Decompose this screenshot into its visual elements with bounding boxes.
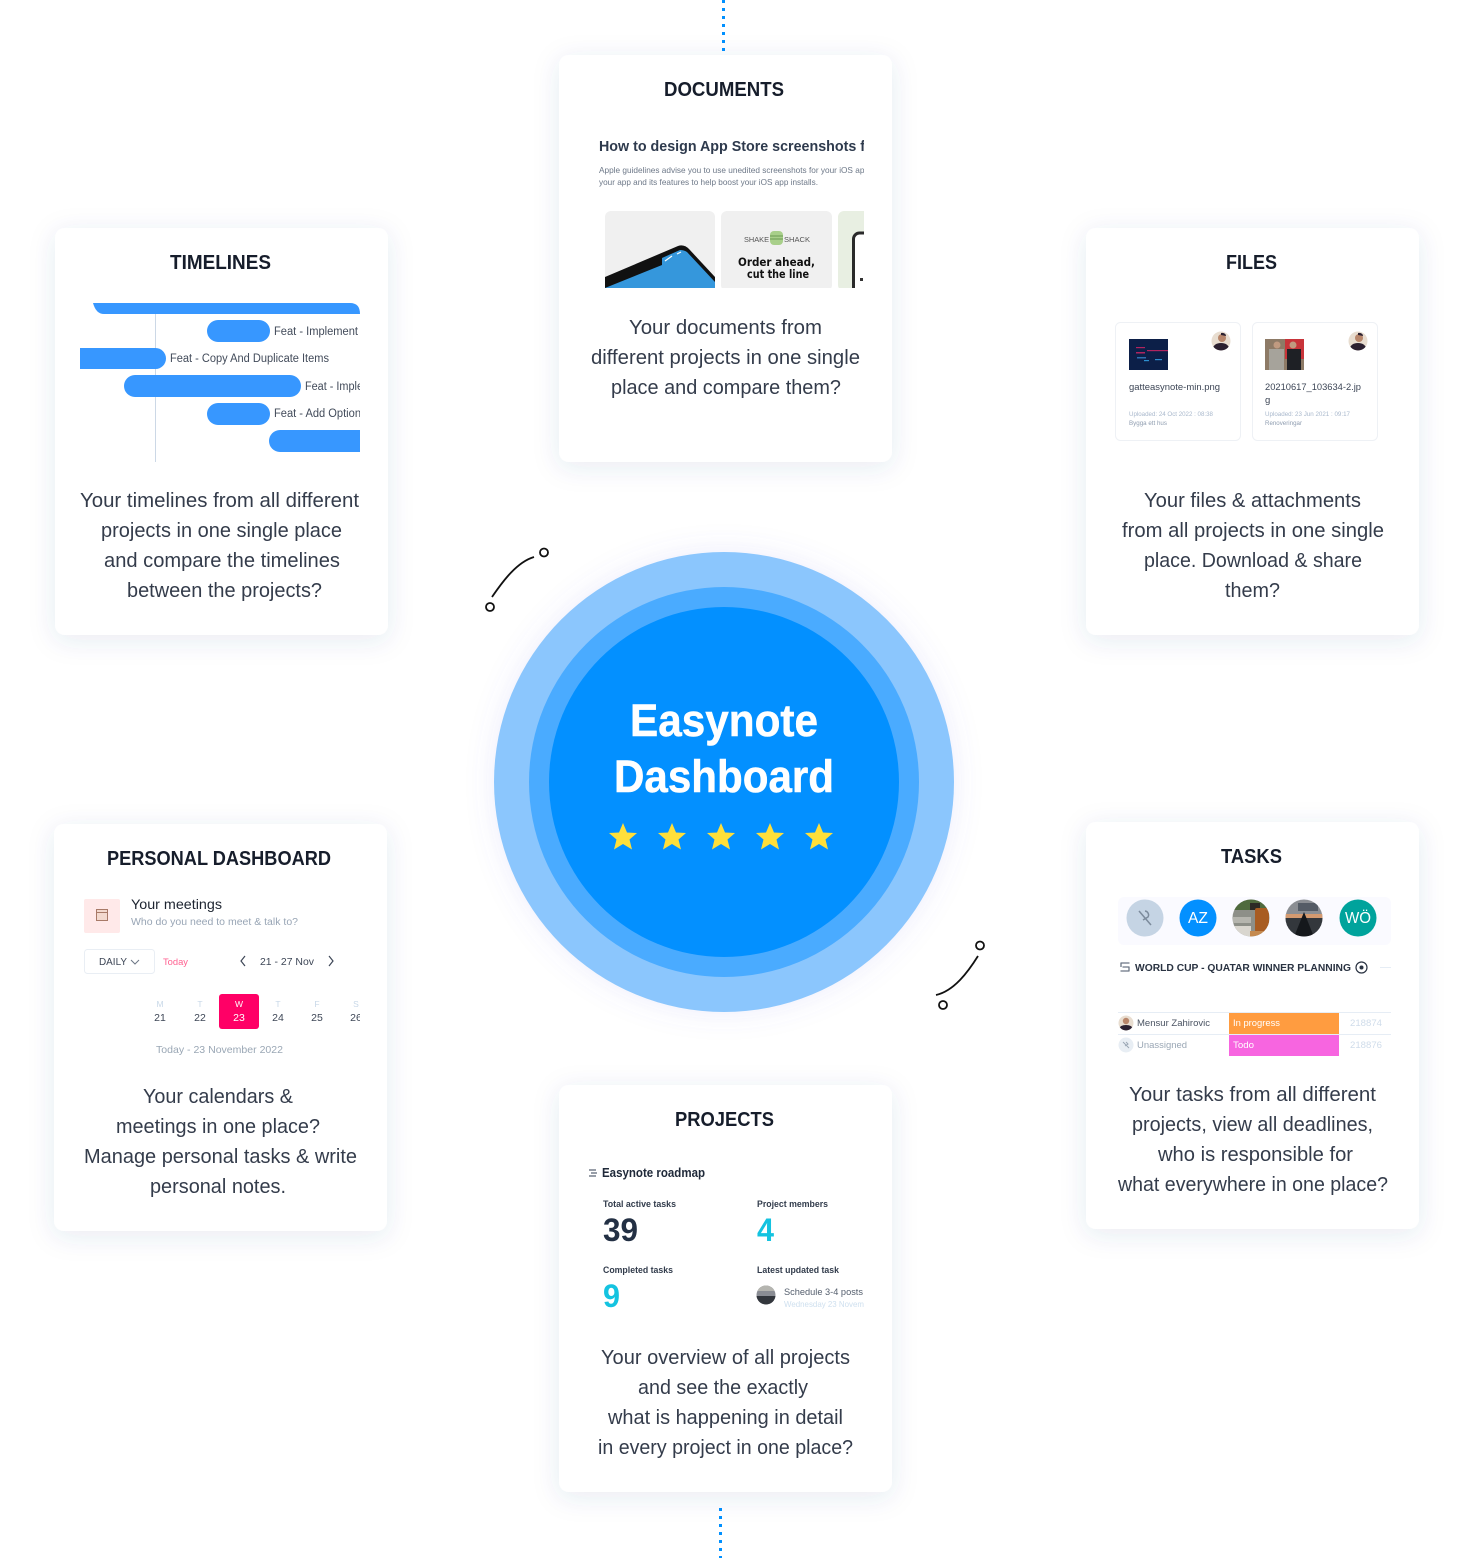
task table <box>1118 1012 1391 1056</box>
article title: How to design App Store screenshots f <box>599 139 865 155</box>
stat: latest updated task: Schedule 3-4 posts <box>784 1287 863 1298</box>
thumbnail: third phone <box>838 211 864 288</box>
description: documents: place and compare them? <box>611 377 841 399</box>
heading: timelines: TIMELINES <box>170 252 271 274</box>
gantt chart: Feat - Imple <box>305 381 363 393</box>
file card: jpg: g <box>1265 395 1270 406</box>
week calendar: 23 <box>233 1012 245 1024</box>
badge title: Dashboard <box>614 751 834 802</box>
member avatars <box>1126 900 1376 936</box>
task table: 218876 <box>1350 1040 1382 1051</box>
dotted connector: top <box>722 0 725 52</box>
heading: files: FILES <box>1226 252 1277 274</box>
description: files: them? <box>1225 580 1280 602</box>
article intro: your app and its features to help boost your iOS app installs. <box>599 177 818 187</box>
panel: personal dashboard <box>54 824 387 1231</box>
task table: Todo <box>1233 1040 1254 1051</box>
thumbnail: shake shack: Order ahead, <box>738 255 815 269</box>
file card: jpg: Renoveringar <box>1265 420 1303 427</box>
week calendar: 26 <box>350 1012 362 1024</box>
week calendar <box>154 994 362 1029</box>
stat: project members: 4 <box>757 1212 774 1248</box>
date range navigation <box>241 956 333 968</box>
article intro: Apple guidelines advise you to use unedited screenshots for your iOS app <box>599 165 869 175</box>
heading: projects: PROJECTS <box>675 1109 774 1131</box>
project title row: WORLD CUP - QUATAR WINNER PLANNING <box>1135 962 1351 974</box>
week calendar: S <box>353 999 359 1009</box>
description: projects: Your overview of all projects <box>601 1347 850 1369</box>
description: projects: in every project in one place? <box>598 1437 853 1459</box>
today link: Today <box>163 957 189 967</box>
week calendar: 21 <box>154 1012 166 1024</box>
stat: total active tasks: 39 <box>603 1212 638 1248</box>
gantt chart <box>80 303 360 462</box>
description: timelines: Your timelines from all different <box>80 490 359 512</box>
thumbnail: shake shack: SHACK <box>784 235 810 244</box>
task table: Unassigned <box>1137 1040 1187 1051</box>
stat: total active tasks: Total active tasks <box>603 1199 676 1209</box>
description: documents: Your documents from <box>629 317 822 339</box>
panel: documents <box>559 55 892 462</box>
panel: projects <box>559 1085 892 1492</box>
task table: In progress <box>1233 1018 1280 1029</box>
description: tasks: what everywhere in one place? <box>1117 1174 1388 1196</box>
file card: jpg <box>1252 322 1378 440</box>
file card: png: Bygga ett hus <box>1129 420 1168 427</box>
description: personal dashboard: Manage personal tasks & write <box>84 1146 357 1168</box>
description: personal dashboard: Your calendars & <box>143 1086 294 1108</box>
description: projects: and see the exactly <box>638 1377 808 1399</box>
project name: Easynote roadmap <box>602 1166 705 1180</box>
file card: png: gatteasynote-min.png <box>1129 382 1220 393</box>
heading: tasks: TASKS <box>1221 846 1282 868</box>
daily dropdown <box>84 950 154 974</box>
week calendar: F <box>314 999 320 1009</box>
central badge <box>494 552 954 1012</box>
description: files: Your files & attachments <box>1144 490 1361 512</box>
panel: timelines <box>55 228 389 635</box>
description: tasks: who is responsible for <box>1157 1144 1353 1166</box>
week calendar: T <box>197 999 203 1009</box>
icon: calendar <box>84 899 120 933</box>
file card: png <box>1116 322 1240 440</box>
thumbnail: phone <box>605 211 715 291</box>
thumbnail: shake shack <box>721 211 832 291</box>
file card: jpg: 20210617_103634-2.jp <box>1265 382 1361 393</box>
week calendar: 22 <box>194 1012 206 1024</box>
description: projects: what is happening in detail <box>607 1407 843 1429</box>
task table: 218874 <box>1350 1018 1382 1029</box>
week calendar: W <box>235 999 243 1009</box>
description: files: place. Download & share <box>1144 550 1362 572</box>
week calendar: 25 <box>311 1012 323 1024</box>
current date: Today - 23 November 2022 <box>156 1044 283 1056</box>
stat: project members: Project members <box>757 1199 828 1209</box>
stat: total active tasks <box>603 1199 676 1248</box>
week calendar: M <box>156 999 164 1009</box>
file card: jpg: Uploaded: 23 Jun 2021 : 09:17 <box>1265 411 1350 418</box>
daily dropdown: DAILY <box>99 956 127 968</box>
week calendar: T <box>275 999 281 1009</box>
week calendar: 24 <box>272 1012 284 1024</box>
description: personal dashboard: meetings in one place? <box>116 1116 320 1138</box>
meetings subheading: Who do you need to meet & talk to? <box>131 917 298 928</box>
file card: png: Uploaded: 24 Oct 2022 : 08:38 <box>1129 411 1213 418</box>
description: tasks: Your tasks from all different <box>1129 1084 1376 1106</box>
description: projects <box>598 1347 853 1459</box>
stat: latest updated task: Latest updated task <box>757 1265 840 1275</box>
dotted connector: bottom <box>719 1508 722 1558</box>
panel: files <box>1086 228 1419 635</box>
decorative curve: upper left <box>486 548 548 611</box>
gantt chart: Feat - Add Option <box>274 408 361 420</box>
stat: latest updated task: Wednesday 23 Novem <box>784 1299 864 1309</box>
description: timelines: projects in one single place <box>101 520 342 542</box>
description: timelines: and compare the timelines <box>104 550 340 572</box>
badge title: Easynote <box>630 695 818 746</box>
description: documents <box>591 317 860 399</box>
badge title <box>614 695 834 802</box>
member avatars: WÖ <box>1345 909 1371 927</box>
stat: completed tasks <box>603 1265 673 1314</box>
meetings heading: Your meetings <box>131 896 222 912</box>
stat: completed tasks: Completed tasks <box>603 1265 673 1275</box>
description: timelines <box>80 490 359 602</box>
document preview <box>599 140 864 288</box>
description: timelines: between the projects? <box>127 580 322 602</box>
description: tasks <box>1117 1084 1388 1196</box>
description: files <box>1122 490 1384 602</box>
task table: Mensur Zahirovic <box>1137 1018 1210 1029</box>
thumbnail: shake shack: SHAKE <box>744 235 769 244</box>
decorative curve: lower right <box>936 942 984 1009</box>
date range navigation: 21 - 27 Nov <box>260 956 315 968</box>
heading: documents: DOCUMENTS <box>664 79 784 101</box>
stat: latest updated task <box>756 1265 864 1309</box>
gantt chart: Feat - Copy And Duplicate Items <box>170 353 329 365</box>
five star rating <box>609 823 833 850</box>
panel: tasks <box>1086 822 1419 1229</box>
member avatars: AZ <box>1188 910 1208 927</box>
stat: project members <box>757 1199 828 1248</box>
thumbnail: shake shack: cut the line <box>747 267 809 281</box>
stat: completed tasks: 9 <box>603 1278 620 1314</box>
article intro <box>599 167 864 186</box>
description: documents: different projects in one single <box>591 347 860 369</box>
description: personal dashboard: personal notes. <box>150 1176 286 1198</box>
description: tasks: projects, view all deadlines, <box>1132 1114 1373 1136</box>
gantt chart: Feat - Implement <box>274 326 359 338</box>
description: files: from all projects in one single <box>1122 520 1384 542</box>
heading: personal dashboard: PERSONAL DASHBOARD <box>107 848 331 870</box>
description: personal dashboard <box>84 1086 357 1198</box>
